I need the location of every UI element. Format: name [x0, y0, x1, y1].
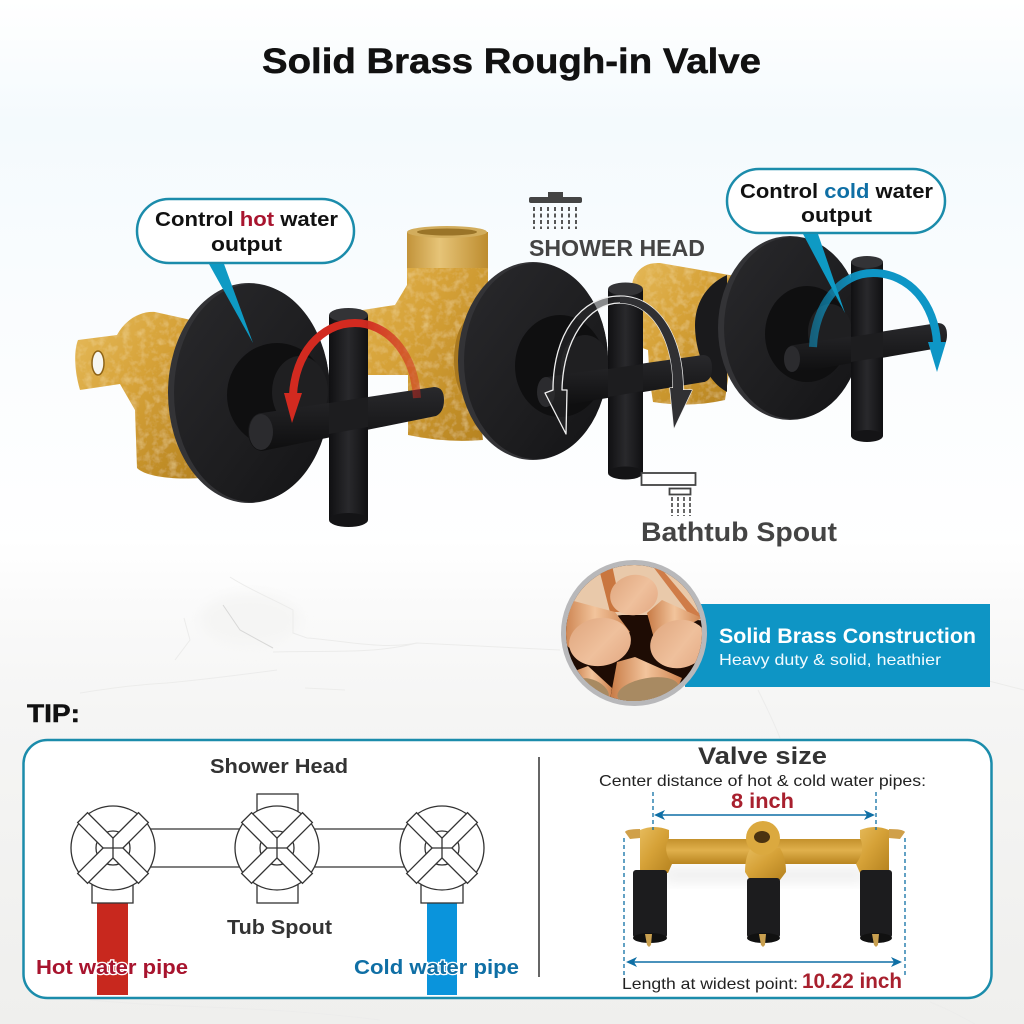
- diagram: valve schematic: [36, 756, 519, 995]
- section: valve size: [599, 743, 926, 993]
- label: bathtub spout: Bathtub Spout: [641, 517, 837, 547]
- connecting pipes: [150, 829, 405, 867]
- main product: brass valve with three black handles: [75, 226, 947, 527]
- left handle: [248, 308, 444, 527]
- brass top cylinder: [407, 226, 488, 268]
- callout: control hot water: [137, 199, 354, 343]
- label: tub spout: Tub Spout: [227, 917, 332, 939]
- dimension: 10.22 inch arrow: [624, 838, 905, 975]
- callout text: hot: Control hot water: [155, 209, 338, 231]
- text: length at widest point: Length at widest point:: [622, 976, 798, 993]
- handle: hot: [52, 787, 174, 909]
- arrow: blue cold water rotation: [813, 273, 946, 372]
- background: marble lower section: [0, 540, 1024, 1024]
- brass body: left elbow: [75, 312, 200, 479]
- icon: shower head: [529, 192, 582, 229]
- callout pointer: cold: [803, 234, 845, 313]
- callout text: cold: Control cold water: [740, 181, 933, 203]
- banner: solid brass construction: [685, 604, 990, 687]
- title: Solid Brass Rough-in Valve: [262, 42, 761, 81]
- cold water pipe: [427, 903, 457, 995]
- callout text: output cold: output: [801, 205, 872, 227]
- arrow: red hot water rotation: [284, 323, 417, 423]
- left flange disc: [168, 283, 330, 503]
- mounting hole: [92, 351, 104, 375]
- arrow: middle two-way rotation: [545, 296, 692, 434]
- heading: valve size: Valve size: [698, 743, 827, 770]
- right cone behind disc: [695, 275, 727, 392]
- callout: control cold water: [727, 169, 945, 313]
- handle: diverter: [216, 787, 338, 909]
- banner heading: Solid Brass Construction: [719, 625, 976, 648]
- label: hot water pipe: Hot water pipe: [36, 957, 188, 979]
- banner subtext: Heavy duty & solid, heathier: [719, 652, 942, 669]
- text: centre distance: Center distance of hot & cold water pipes:: [599, 773, 926, 790]
- heading: TIP: TIP:: [27, 700, 80, 728]
- icon: bathtub spout: [642, 473, 696, 516]
- dimension: 8 inch arrow: [653, 792, 876, 830]
- middle handle: [537, 282, 712, 480]
- right handle: [784, 256, 947, 442]
- handle: cold: [381, 787, 503, 909]
- brass body: centre tee: [350, 232, 488, 441]
- callout text: output hot: output: [211, 234, 282, 256]
- brass collar by middle disc: [454, 320, 486, 400]
- outlet stubs: [92, 794, 463, 903]
- mini valve photo: [625, 821, 905, 947]
- value: 8 inch: 8 inch: [731, 790, 794, 813]
- brass body: right elbow: [620, 263, 735, 405]
- callout pointer: hot: [209, 264, 253, 343]
- label: shower head: Shower Head: [210, 756, 348, 778]
- value: 10.22 inch: 10.22 inch: [802, 970, 902, 993]
- copper rods photo circle: [561, 560, 707, 706]
- label: cold water pipe: Cold water pipe: [354, 957, 519, 979]
- background: pale blue top: [0, 0, 1024, 560]
- hot water pipe: [97, 903, 128, 995]
- panel: tip box: [24, 740, 992, 998]
- right flange disc: [718, 236, 862, 420]
- middle flange disc: [458, 262, 609, 460]
- label: shower head: SHOWER HEAD: [529, 235, 705, 261]
